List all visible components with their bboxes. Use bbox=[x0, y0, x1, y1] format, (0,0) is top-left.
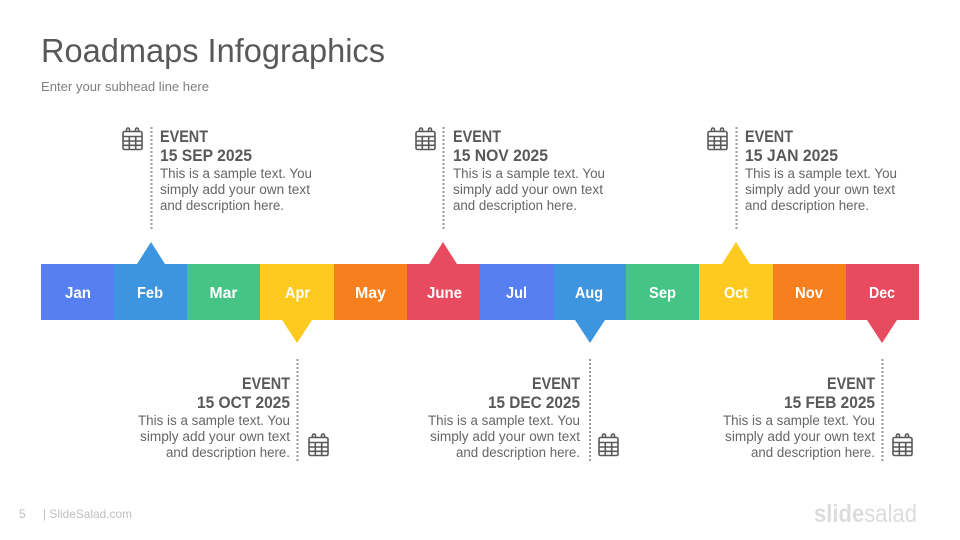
event: 15 Oct 2025 bbox=[138, 359, 328, 462]
event text: simply add your own text bbox=[745, 182, 895, 197]
event text: This is a sample text. You bbox=[428, 413, 580, 428]
event: 15 Jan 2025 bbox=[708, 127, 897, 230]
event text bbox=[138, 375, 290, 460]
event text: and description here. bbox=[745, 198, 869, 213]
icon: calendar bbox=[708, 128, 727, 150]
timeline bar bbox=[41, 242, 919, 343]
month: May bbox=[334, 264, 407, 320]
month: Feb with up arrow bbox=[114, 242, 187, 320]
month: Jul bbox=[480, 264, 554, 320]
month: Jul: Jul bbox=[506, 285, 527, 302]
event text: and description here. bbox=[456, 445, 580, 460]
event text: 15 JAN 2025 bbox=[745, 147, 838, 165]
event text: EVENT bbox=[242, 375, 290, 393]
month: Apr with down arrow: Apr bbox=[285, 285, 310, 302]
month: Sep: Sep bbox=[649, 285, 676, 302]
event: 15 Sep 2025 bbox=[123, 127, 312, 230]
month: Dec with down arrow: Dec bbox=[869, 285, 895, 302]
month: Feb with up arrow: Feb bbox=[137, 285, 163, 302]
month: Oct with up arrow: Oct bbox=[724, 285, 748, 302]
month: May: May bbox=[355, 285, 386, 302]
event text: This is a sample text. You bbox=[160, 166, 312, 181]
event text: and description here. bbox=[453, 198, 577, 213]
event text: and description here. bbox=[166, 445, 290, 460]
month: Dec with down arrow bbox=[846, 264, 919, 343]
month: Mar bbox=[187, 264, 260, 320]
event text: 15 SEP 2025 bbox=[160, 147, 252, 165]
event: 15 Nov 2025 bbox=[416, 127, 605, 230]
event: 15 Dec 2025 bbox=[428, 359, 618, 462]
event text: simply add your own text bbox=[160, 182, 310, 197]
month: Apr with down arrow bbox=[260, 264, 334, 343]
event text: This is a sample text. You bbox=[138, 413, 290, 428]
event text: This is a sample text. You bbox=[453, 166, 605, 181]
event text bbox=[723, 375, 875, 460]
event text bbox=[160, 128, 312, 213]
icon: calendar bbox=[599, 434, 618, 456]
month: Aug with down arrow bbox=[554, 264, 626, 343]
icon: calendar bbox=[309, 434, 328, 456]
event text: EVENT bbox=[532, 375, 580, 393]
event text: 15 DEC 2025 bbox=[488, 394, 580, 412]
footer page number: 5 bbox=[19, 507, 26, 521]
event text: EVENT bbox=[827, 375, 875, 393]
title: Roadmaps Infographics bbox=[41, 32, 385, 69]
event text: simply add your own text bbox=[430, 429, 580, 444]
month: June with up arrow bbox=[407, 242, 480, 320]
month: Jan: Jan bbox=[65, 285, 91, 302]
event text: 15 NOV 2025 bbox=[453, 147, 548, 165]
event text: EVENT bbox=[745, 128, 793, 146]
month: Aug with down arrow: Aug bbox=[575, 285, 603, 302]
event text bbox=[428, 375, 580, 460]
event text: This is a sample text. You bbox=[745, 166, 897, 181]
event text: 15 FEB 2025 bbox=[784, 394, 875, 412]
event text: simply add your own text bbox=[453, 182, 603, 197]
event text: 15 OCT 2025 bbox=[197, 394, 290, 412]
event text: EVENT bbox=[453, 128, 501, 146]
event text bbox=[453, 128, 605, 213]
month: Sep bbox=[626, 264, 699, 320]
month: Nov: Nov bbox=[795, 285, 823, 302]
event: 15 Feb 2025 bbox=[723, 359, 912, 462]
logo: slidesalad wordmark: slidesalad bbox=[814, 500, 917, 528]
icon: calendar bbox=[123, 128, 142, 150]
month: Oct with up arrow bbox=[699, 242, 773, 320]
month: Nov bbox=[773, 264, 846, 320]
footer site name: | SlideSalad.com bbox=[43, 507, 132, 521]
icon: calendar bbox=[416, 128, 435, 150]
event text: simply add your own text bbox=[725, 429, 875, 444]
month: Jan bbox=[41, 264, 114, 320]
event text: and description here. bbox=[751, 445, 875, 460]
event text: This is a sample text. You bbox=[723, 413, 875, 428]
event text bbox=[745, 128, 897, 213]
event text: and description here. bbox=[160, 198, 284, 213]
month: Mar: Mar bbox=[210, 285, 238, 302]
subhead: Enter your subhead line here bbox=[41, 79, 209, 94]
icon: calendar bbox=[893, 434, 912, 456]
event text: EVENT bbox=[160, 128, 208, 146]
month: June with up arrow: June bbox=[427, 285, 462, 302]
event text: simply add your own text bbox=[140, 429, 290, 444]
